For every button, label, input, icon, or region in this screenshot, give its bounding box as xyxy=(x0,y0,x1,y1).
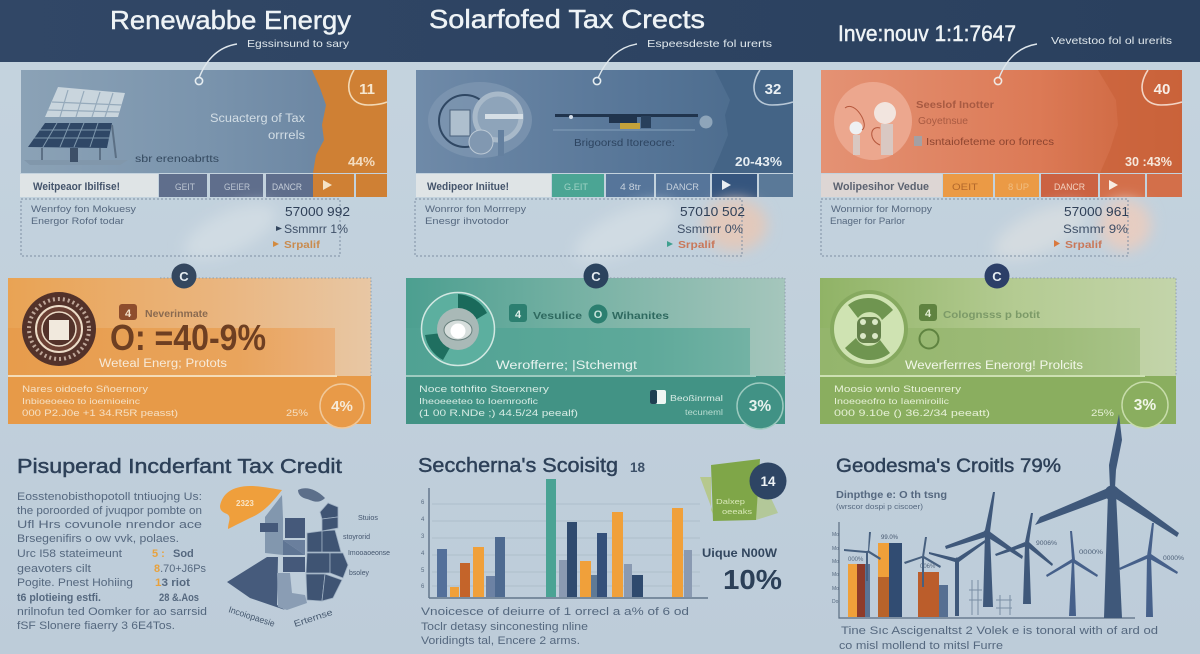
panel: middle card orange xyxy=(8,264,371,428)
number badge: 40 xyxy=(1154,81,1170,98)
turbine large xyxy=(1035,414,1179,618)
card notes: Nares oidoefo Sñoernory xyxy=(22,384,148,395)
map light southern region xyxy=(277,573,307,610)
stat callout: 10% xyxy=(723,564,782,595)
percent circle xyxy=(1122,382,1168,428)
text block: left section body: nrilnofun ted Oomker for ao sarrsid xyxy=(17,606,207,618)
wind turbines and bars chart xyxy=(832,414,1184,618)
bar chart: 5 xyxy=(421,568,425,574)
turbine small 3 xyxy=(929,540,986,616)
lattice details xyxy=(969,580,1012,615)
subheading: right section xyxy=(836,489,947,511)
card heading text: Scuacterg of Tax xyxy=(210,113,305,125)
ring xyxy=(920,330,938,348)
wind turbines and bars chart: Mo xyxy=(832,559,839,565)
panel: top card 3 details: 57000 961 xyxy=(1064,204,1129,219)
sticky note with badge: Dalxep xyxy=(716,497,745,506)
bar chart: 4 xyxy=(421,551,425,557)
bar chart: 6 xyxy=(421,584,425,590)
turbine 2 xyxy=(945,492,1023,607)
map labels: Incoiopaesie xyxy=(227,604,276,629)
heading: right section: Geodesma's Croitls 79% xyxy=(836,456,1061,477)
panel: top card 3 details: Ssmmr 9% xyxy=(1063,224,1128,236)
map labels: Stuios xyxy=(358,515,378,522)
text block: middle section body: Vnoicesce of deiurre of 1 orrecl a a% of 6 od xyxy=(421,606,689,618)
bar chart: 6 xyxy=(421,500,425,506)
panel: top card 2 tab bar: 4 8tr xyxy=(620,182,641,192)
turbine small 2 xyxy=(904,537,941,587)
text block: left section body: Brsegenifirs o ow vvk, polaes. xyxy=(17,533,179,545)
subtitle: renewable energy: Egssinsund to sary xyxy=(247,38,350,50)
chart labels: 0000% xyxy=(1163,555,1184,562)
card notes xyxy=(834,384,1115,419)
panel: top card 1 details xyxy=(21,193,350,271)
panel: top card 3 details: Srpalif xyxy=(1065,239,1103,251)
panel: top card 3 details: Enager for Parlor xyxy=(830,216,905,227)
text block: right section body: Tine Sıc Ascigenaltst 2 Volek e is tonoral with of ard od xyxy=(841,625,1158,637)
badge label: Neverinmate xyxy=(145,308,208,320)
panel: top card 1 tab bar: GEIT xyxy=(175,182,195,192)
badge 4 xyxy=(919,304,937,321)
dark side area xyxy=(712,70,793,173)
text block: left section body: Eosstenobisthopotoll tntiuojng Us: xyxy=(17,491,202,503)
card title: Werofferre; |Stchemgt xyxy=(496,360,638,372)
connector xyxy=(994,44,1037,85)
card caption: sbr erenoabrtts xyxy=(135,153,219,165)
map labels: Imooaoeonse xyxy=(348,550,390,557)
text block: left section body: 28 &.Aos xyxy=(159,592,199,604)
text block: left section body: fSF Slonere fiaerry 3 6E4Tos. xyxy=(17,620,175,632)
panel: top card 1 details: 57000 992 xyxy=(285,204,350,219)
badge label: Vesulice xyxy=(533,310,582,322)
text block: left section body: 13 riot xyxy=(155,577,190,589)
text block: left section body: Sod xyxy=(173,548,194,560)
icon: wheel xyxy=(422,292,494,366)
heading: middle section: Seccherna's Scoisitg xyxy=(418,455,618,477)
chart labels xyxy=(1036,540,1184,562)
subheading: right section: Dinpthge e: O th tsng xyxy=(836,489,947,501)
text block: right section body: co misl mollend to mitsl Furre xyxy=(839,640,1003,652)
wind turbines and bars chart: Do xyxy=(832,599,839,605)
panel: top card 2 tab bar: Wedipeor Iniitue! xyxy=(427,181,509,193)
card heading text: Seeslof Inotter xyxy=(916,99,994,111)
number badge: 11 xyxy=(359,81,375,98)
number badge xyxy=(754,70,793,105)
text block: middle section body: Toclr detasy sinconesting nline xyxy=(421,621,588,633)
bar group 3 xyxy=(918,564,948,617)
panel: top card 3 tab bar: 8 UP xyxy=(1008,182,1029,192)
panel: middle card teal xyxy=(406,264,785,429)
side note xyxy=(670,393,723,417)
map light column xyxy=(265,495,283,555)
text block: left section body: the poroorded of jvuqpor pombte on xyxy=(17,505,202,517)
panel: top card 2 tab bar xyxy=(416,174,793,197)
badge O: O xyxy=(594,309,603,321)
panel: top card 2 details xyxy=(415,191,767,273)
badge letter C: C xyxy=(591,269,601,284)
wind turbines and bars chart: Mo xyxy=(832,546,839,552)
percent circle: 3% xyxy=(1134,397,1156,414)
badge 4 xyxy=(509,304,527,322)
card title: Weverferrres Enerorg! Prolcits xyxy=(905,360,1083,372)
card notes: Inoeoeofro to Iaemiroilic xyxy=(834,396,950,406)
device strip xyxy=(553,114,712,130)
orange speech blob xyxy=(220,486,282,529)
percent circle: 4% xyxy=(331,398,353,415)
number badge: 32 xyxy=(765,81,781,98)
text block: middle section body xyxy=(421,606,689,647)
stat callout: Uique N00W xyxy=(702,548,777,560)
card notes: Inbioeoeeo to ioemioeinc xyxy=(22,396,141,406)
icon: green seal xyxy=(830,290,908,368)
card notes: Noce tothfito Stoerxnery xyxy=(419,384,549,395)
panel: middle card green xyxy=(820,264,1176,428)
wind turbines and bars chart: Mo xyxy=(832,586,839,592)
sticky note with badge: 14 xyxy=(760,474,776,489)
text block: left section body: Urc I58 stateimeunt xyxy=(17,548,122,560)
panel: top card 1 details: Wenrfoy fon Mokuesy xyxy=(31,204,136,215)
panel: top card 2 details: Ssmmrr 0% xyxy=(677,224,743,236)
badge 4: 4 xyxy=(125,308,132,320)
badge letter C xyxy=(984,264,1010,288)
subtitle: solar tax credits: Espeesdeste fol urerts xyxy=(647,38,772,50)
header band xyxy=(0,0,1200,62)
panel: top card 1 tab bar xyxy=(20,174,387,197)
text block: right section body xyxy=(839,625,1158,652)
card heading second line: orrrels xyxy=(268,130,305,142)
panel: top card 3 investment xyxy=(821,44,1182,173)
percent circle: 3% xyxy=(749,398,771,415)
bar group 2 xyxy=(878,535,902,617)
turbine 5 xyxy=(1119,523,1178,617)
bar group 3: 006% xyxy=(920,564,936,570)
map central regions xyxy=(260,518,305,572)
card caption: Brigoorsd Itoreocre: xyxy=(574,137,675,149)
heading: middle section: 18 xyxy=(630,459,645,475)
percent circle xyxy=(320,384,364,428)
big value: O: =40-9% xyxy=(110,317,266,358)
text block: left section body: t6 plotieing estfi. xyxy=(17,592,101,604)
map eastern regions xyxy=(306,503,348,601)
card caption: Isntaiofeteme oro forrecs xyxy=(926,137,1054,148)
wind turbines and bars chart: Mo xyxy=(832,572,839,578)
panel: top card 2 details: 57010 502 xyxy=(680,204,745,219)
title: renewable energy: Renewabbe Energy xyxy=(110,5,351,35)
map labels: stoyrorid xyxy=(343,534,370,541)
card notes: 25% xyxy=(286,408,309,419)
bar chart: 3 xyxy=(421,534,425,540)
badge label: Colognsss p botit xyxy=(943,309,1041,321)
badge letter C xyxy=(584,264,608,288)
panel: top card 1 details: Ssmmrr 1% xyxy=(284,224,348,236)
badge 4: 4 xyxy=(925,308,932,320)
card notes: 000 P2.J0e +1 34.R5R peasst) xyxy=(22,408,178,419)
map labels: Erternse xyxy=(293,607,334,629)
side note: Beoßinrmal xyxy=(670,393,723,403)
percent circle xyxy=(737,383,783,429)
text block: left section body: Pogite. Pnest Hohiing xyxy=(17,577,133,589)
connector xyxy=(593,44,637,85)
panel: top card 2 tab bar: G.EIT xyxy=(564,182,588,192)
title: investment: Inve:nouv 1:1:7647 xyxy=(838,21,1016,46)
icon: lamp sketch xyxy=(834,82,912,160)
badge O xyxy=(588,304,608,324)
title: solar tax credits: Solarfofed Tax Crects xyxy=(429,4,705,34)
panel: top card 1 solar xyxy=(21,44,387,173)
badge 4: 4 xyxy=(515,309,522,321)
sticky note with badge: oeeaks xyxy=(722,507,752,516)
panel: top card 3 tab bar: DANCR xyxy=(1054,182,1085,192)
panel: top card 2 details: Wonrror fon Morrrepy xyxy=(425,204,526,215)
sticky note with badge xyxy=(700,459,786,521)
chart labels: 0000% xyxy=(1079,549,1103,556)
panel: top card 2 tab bar: DANCR xyxy=(666,182,700,192)
badge 4 xyxy=(119,304,137,320)
text block: left section body: 8.70+J6Ps xyxy=(154,563,206,575)
bar group 2: 99.0% xyxy=(881,535,899,541)
panel: top card 1 tab bar: Weitpeaor Ibilfise! xyxy=(33,181,120,193)
turbine small 1 xyxy=(844,532,881,581)
panel: top card 3 details xyxy=(821,193,1151,271)
wind turbines and bars chart: Mo xyxy=(832,532,839,538)
heading: left section: Pisuperad Incderfant Tax Credit xyxy=(17,456,343,478)
percent: 20-43% xyxy=(735,155,782,169)
panel: top card 1 details: Energor Rofof todar xyxy=(31,216,124,227)
badge letter C xyxy=(172,264,196,288)
bar group 1 xyxy=(848,557,870,617)
icon: brown seal xyxy=(22,292,96,366)
percent: 44% xyxy=(348,155,375,169)
panel: top card 3 tab bar: Wolipesihor Vedue xyxy=(833,181,929,193)
text block: left section body: geavoters cilt xyxy=(17,563,91,575)
turbine 4 xyxy=(1046,531,1098,616)
badge letter C: C xyxy=(992,269,1002,284)
panel: top card 2 details: Enesgr ihvotodor xyxy=(425,216,509,227)
orange speech blob: 2323 xyxy=(236,499,254,508)
connector xyxy=(195,44,237,85)
subheading: right section: (wrscor dospi p ciscoer) xyxy=(836,502,924,511)
panel: top card 1 tab bar: GEIER xyxy=(224,182,250,192)
card notes: 25% xyxy=(1091,408,1115,419)
map labels xyxy=(227,515,390,629)
panel: top card 2 tax credits xyxy=(416,44,793,173)
stat callout xyxy=(702,548,782,595)
icon: solar panels xyxy=(24,87,128,165)
card notes xyxy=(22,384,309,419)
bar chart: 4 xyxy=(421,517,425,523)
side note: tecuneml xyxy=(685,408,723,417)
number badge xyxy=(1142,70,1182,105)
island xyxy=(298,488,325,502)
panel: top card 3 tab bar xyxy=(821,174,1182,197)
card notes: Iheoeeeteo to Ioemroofic xyxy=(419,396,539,406)
map of regions xyxy=(220,486,390,629)
card notes: 000 9.10e () 36.2/34 peeatt) xyxy=(834,408,990,419)
icon: toggle xyxy=(650,390,666,404)
card heading second line: Goyetnsue xyxy=(918,115,968,127)
badge letter C: C xyxy=(179,269,189,284)
map big southwest region xyxy=(227,557,285,610)
panel: top card 1 tab bar: DANCR xyxy=(272,182,302,192)
orange side area xyxy=(312,70,387,173)
number badge xyxy=(349,70,387,105)
panel: top card 2 details: Srpalif xyxy=(678,239,716,251)
card notes: (1 00 R.NDe ;) 44.5/24 peealf) xyxy=(419,408,578,419)
panel: top card 1 details: Srpalif xyxy=(284,239,321,251)
card title: Weteal Energ; Protots xyxy=(99,358,227,370)
text block: left section body: Ufl Hrs covunole nrendor ace xyxy=(17,519,202,531)
darker side area xyxy=(1098,70,1182,173)
panel: top card 3 tab bar: OEIT xyxy=(952,182,979,192)
card notes: Moosio wnlo Stuoenrery xyxy=(834,384,961,395)
text block: middle section body: Voridingts tal, Encere 2 arms. xyxy=(421,635,580,647)
subtitle: investment: Vevetstoo fol ol urerits xyxy=(1051,35,1172,47)
icon: gauges xyxy=(428,82,532,158)
panel: top card 3 details: Wonrnior for Mornopy xyxy=(831,204,932,215)
percent: 30 :43% xyxy=(1125,155,1172,169)
turbine 3 xyxy=(995,513,1053,604)
map labels: bsoley xyxy=(349,570,369,577)
text block: left section body xyxy=(17,491,207,632)
text block: left section body: 5 : xyxy=(152,548,165,560)
bar chart xyxy=(421,479,708,598)
bar group 1: 000% xyxy=(848,557,864,563)
chart labels: 9006% xyxy=(1036,540,1057,547)
card notes xyxy=(419,384,578,419)
badge label second: Wihanites xyxy=(612,310,669,322)
